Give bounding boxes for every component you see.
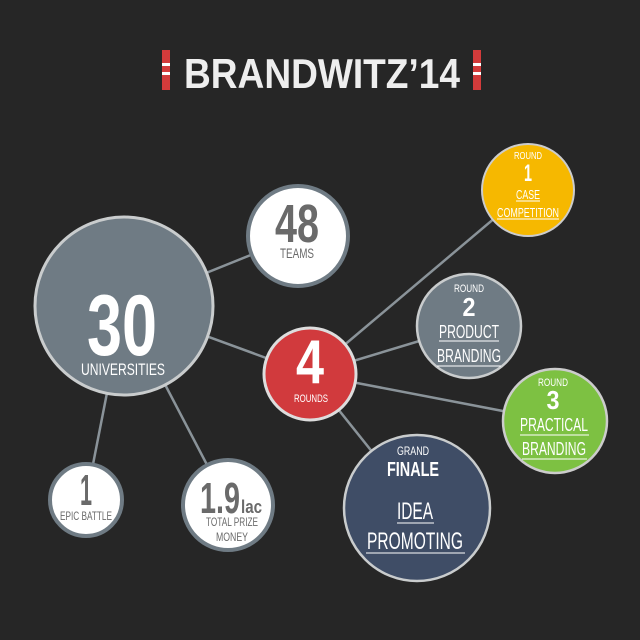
circle: 30 universities <box>35 217 213 395</box>
title: BRANDWITZ’14 <box>184 50 461 97</box>
circle: 1 epic battle: 1 <box>80 466 92 515</box>
circle: round 3 <box>503 369 607 473</box>
circle: round 1: COMPETITION <box>497 205 559 220</box>
circle: round 3: BRANDING <box>522 439 586 459</box>
circle: round 2: 2 <box>462 292 476 322</box>
circle: 1.9 lac prize money: MONEY <box>216 530 248 544</box>
circle: 1.9 lac prize money <box>183 460 273 550</box>
circle: 4 rounds <box>264 328 356 420</box>
circle: 48 teams <box>248 186 348 286</box>
circle: 1.9 lac prize money: lac <box>241 497 262 517</box>
connector lines <box>86 190 555 508</box>
circle: round 2 <box>417 274 521 378</box>
circle: 1.9 lac prize money: 1.9 <box>200 474 240 523</box>
circle: round 1: ROUND <box>514 151 542 162</box>
circle: 30 universities: 30 <box>87 278 157 374</box>
circle: 1 epic battle <box>50 464 122 536</box>
circle: round 3: PRACTICAL <box>520 415 588 435</box>
circle: round 3: 3 <box>546 385 560 415</box>
circle: round 2: BRANDING <box>437 346 501 366</box>
circle: grand finale: FINALE <box>387 459 439 481</box>
circle: grand finale: IDEA <box>397 498 433 525</box>
circle: 1 epic battle: EPIC BATTLE <box>60 509 112 523</box>
circle: grand finale <box>344 435 490 581</box>
circle: 4 rounds: ROUNDS <box>294 393 328 405</box>
circle: 4 rounds: 4 <box>296 328 324 397</box>
circle: 1.9 lac prize money: TOTAL PRIZE <box>206 515 258 529</box>
circle: grand finale: GRAND <box>397 444 429 458</box>
circle: round 2: PRODUCT <box>439 322 499 342</box>
circle: round 2: ROUND <box>454 283 484 295</box>
circle: 30 universities: UNIVERSITIES <box>81 360 165 379</box>
circle: round 3: ROUND <box>538 377 568 389</box>
circle: round 1 <box>482 144 574 236</box>
circle: 48 teams: 48 <box>275 194 319 254</box>
circle: round 1: CASE <box>516 187 540 202</box>
circle: grand finale: PROMOTING <box>367 528 463 555</box>
circle: 48 teams: TEAMS <box>280 245 314 261</box>
circle: round 1: 1 <box>524 160 532 187</box>
